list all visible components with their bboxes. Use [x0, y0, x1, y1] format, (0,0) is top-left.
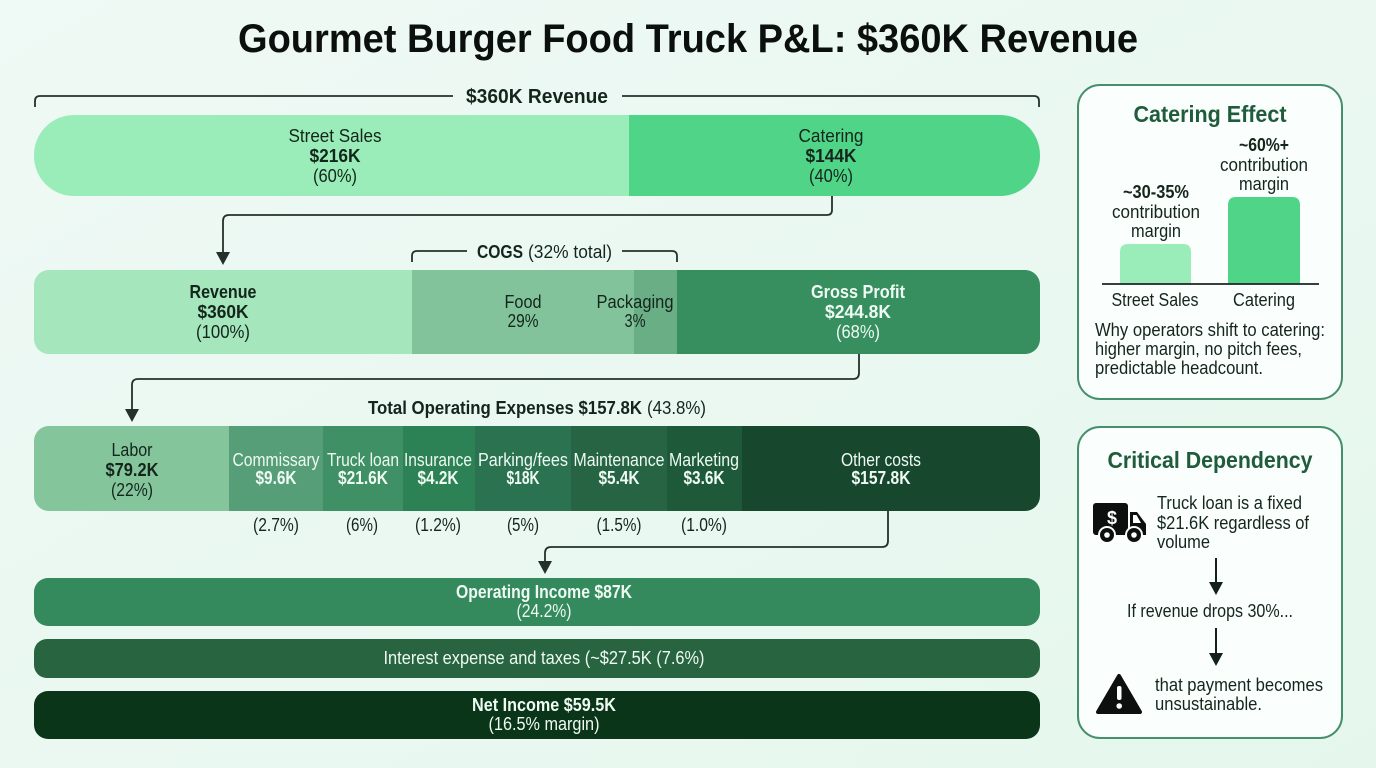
revenue segment: $360K	[198, 302, 248, 322]
insurance segment: Insurance	[404, 450, 472, 470]
expense percentages: (1.5%)	[596, 515, 642, 535]
gross profit segment: (68%)	[836, 322, 880, 342]
marketing segment: Marketing	[669, 450, 739, 470]
marketing segment	[669, 450, 739, 488]
panel: catering effect	[1078, 85, 1342, 399]
catering margin label: margin	[1239, 174, 1289, 194]
margin bar chart	[1102, 197, 1319, 310]
marketing segment: $3.6K	[684, 468, 724, 488]
panel: critical dependency	[1078, 427, 1342, 738]
revenue split bar	[34, 115, 1040, 196]
catering margin label: ~60%+	[1239, 135, 1289, 155]
expense percentages: (6%)	[346, 515, 378, 535]
operating income bar	[34, 578, 1040, 626]
arrow: down to revenue drop	[1209, 558, 1223, 595]
maintenance segment: Maintenance	[574, 450, 664, 470]
packaging segment: Packaging	[596, 292, 674, 312]
street sales segment: Street Sales	[288, 126, 382, 146]
revenue drop text: If revenue drops 30%...	[1127, 601, 1293, 621]
parking and fees segment	[478, 450, 568, 488]
revenue bracket: $360K Revenue	[466, 86, 608, 108]
truck loan text: Truck loan is a fixed	[1157, 493, 1302, 513]
labor segment: (22%)	[111, 480, 153, 500]
operating expenses heading: (43.8%)	[647, 398, 706, 418]
revenue segment: Revenue	[190, 282, 256, 302]
commissary segment	[232, 450, 320, 488]
consequence text: unsustainable.	[1155, 694, 1262, 714]
gross profit segment: $244.8K	[825, 302, 891, 322]
labor segment	[106, 440, 158, 500]
food segment: 29%	[508, 311, 538, 331]
catering note: higher margin, no pitch fees,	[1095, 339, 1302, 359]
net income bar: Net Income $59.5K	[472, 695, 616, 715]
packaging segment: 3%	[624, 311, 646, 331]
parking and fees segment: Parking/fees	[478, 450, 568, 470]
parking and fees segment: $18K	[506, 468, 540, 488]
catering note: predictable headcount.	[1095, 358, 1263, 378]
interest and taxes bar: Interest expense and taxes (~$27.5K (7.6%)	[384, 648, 704, 668]
other costs segment	[841, 450, 921, 488]
street sales margin label: contribution	[1112, 202, 1200, 222]
net income bar: (16.5% margin)	[488, 714, 600, 734]
COGS bracket: COGS	[477, 242, 523, 262]
title: Gourmet Burger Food Truck P&L: $360K Revenue	[238, 17, 1138, 61]
margin bar chart: Street Sales	[1112, 290, 1198, 310]
street sales segment: $216K	[310, 146, 360, 166]
street sales margin label: margin	[1131, 221, 1181, 241]
operating income bar: Operating Income $87K	[456, 582, 632, 602]
labor segment: $79.2K	[106, 460, 158, 480]
other costs segment: Other costs	[841, 450, 921, 470]
expense percentages: (2.7%)	[253, 515, 299, 535]
expense percentages: (1.2%)	[415, 515, 461, 535]
operating income bar: (24.2%)	[516, 601, 572, 621]
expense percentages	[253, 515, 727, 535]
catering segment: $144K	[806, 146, 856, 166]
truck loan text	[1157, 493, 1310, 552]
revenue bracket	[35, 86, 1039, 108]
arrow: catering to revenue	[216, 196, 832, 265]
gross profit segment	[811, 282, 905, 342]
catering margin label: contribution	[1220, 155, 1308, 175]
critical dependency heading: Critical Dependency	[1108, 447, 1313, 473]
operating expenses heading: Total Operating Expenses $157.8K	[368, 398, 642, 418]
insurance segment: $4.2K	[418, 468, 458, 488]
operating expenses bar	[34, 426, 1040, 511]
COGS bracket	[412, 242, 677, 262]
consequence text	[1155, 675, 1323, 714]
other costs segment: $157.8K	[852, 468, 910, 488]
catering margin label	[1220, 135, 1308, 194]
catering segment: (40%)	[809, 166, 853, 186]
icon: warning triangle	[1098, 676, 1140, 712]
arrow: other costs to operating income	[538, 511, 888, 574]
food segment: Food	[504, 292, 542, 312]
expense percentages: (1.0%)	[681, 515, 727, 535]
icon: truck with dollar sign: $	[1107, 508, 1117, 528]
labor segment: Labor	[112, 440, 152, 460]
expense percentages: (5%)	[507, 515, 539, 535]
street sales segment	[288, 126, 382, 186]
catering effect heading: Catering Effect	[1134, 101, 1287, 127]
street sales margin label	[1112, 182, 1200, 241]
consequence text: that payment becomes	[1155, 675, 1323, 695]
street sales segment: (60%)	[313, 166, 357, 186]
commissary segment: Commissary	[232, 450, 320, 470]
gross profit bar	[34, 270, 1040, 354]
street sales margin label: ~30-35%	[1123, 182, 1189, 202]
arrow: gross profit to labor	[125, 354, 859, 422]
COGS bracket: (32% total)	[528, 242, 612, 262]
packaging segment	[596, 292, 674, 331]
net income bar	[34, 691, 1040, 739]
margin bar chart: Catering	[1233, 290, 1295, 310]
interest and taxes bar	[34, 639, 1040, 678]
commissary segment: $9.6K	[256, 468, 296, 488]
catering segment	[798, 126, 864, 186]
maintenance segment: $5.4K	[598, 468, 640, 488]
truck loan text: $21.6K regardless of	[1157, 513, 1310, 533]
insurance segment	[404, 450, 472, 488]
icon: truck with dollar sign	[1093, 503, 1146, 544]
truck loan segment	[327, 450, 399, 488]
maintenance segment	[574, 450, 664, 488]
revenue segment: (100%)	[196, 322, 250, 342]
revenue segment	[190, 282, 256, 342]
catering segment: Catering	[798, 126, 864, 146]
truck loan text: volume	[1157, 532, 1210, 552]
food segment	[504, 292, 542, 331]
catering note: Why operators shift to catering:	[1095, 320, 1325, 340]
truck loan segment: $21.6K	[338, 468, 388, 488]
arrow: down to consequence	[1209, 628, 1223, 666]
catering note	[1095, 320, 1325, 378]
gross profit segment: Gross Profit	[811, 282, 905, 302]
truck loan segment: Truck loan	[327, 450, 399, 470]
